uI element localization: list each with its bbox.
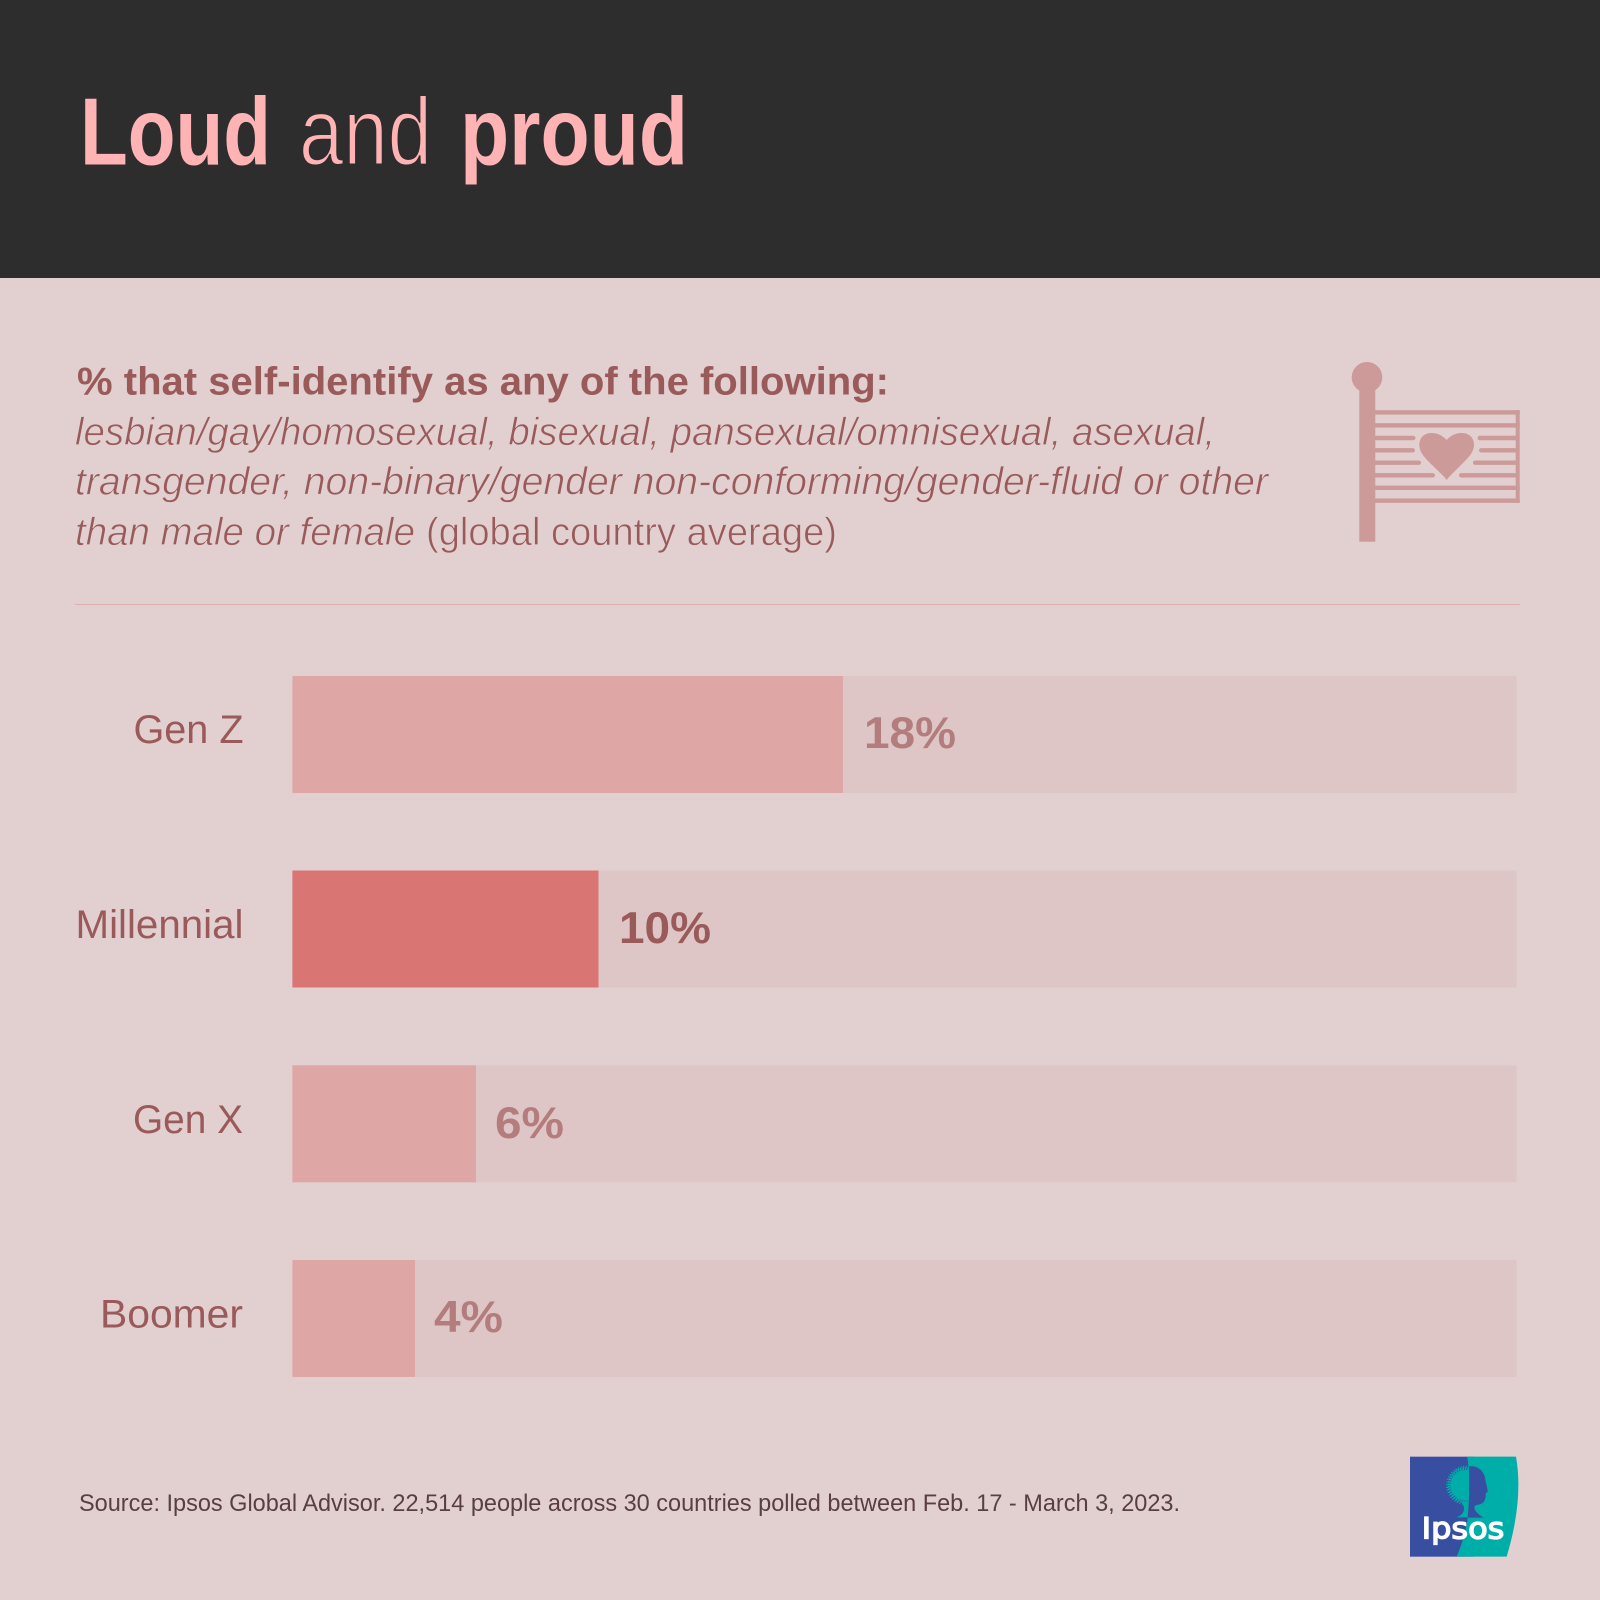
logo tree <box>1446 1466 1470 1518</box>
row: Boomer <box>100 1260 1516 1377</box>
description body: transgender, non-binary/gender non-conforming/gender-fluid or other <box>75 460 1270 504</box>
logo wordmark: Ipsos <box>1422 1511 1504 1545</box>
description body: (global country average) <box>426 511 837 554</box>
row: Gen X: Gen X <box>133 1098 243 1142</box>
divider <box>75 604 1520 605</box>
icon: Ipsos logo <box>1410 1457 1518 1557</box>
row: Gen X: 6% <box>495 1099 564 1148</box>
title <box>80 78 688 186</box>
bar chart <box>76 676 1516 1377</box>
description body: than male or female <box>75 511 415 554</box>
row: Gen Z <box>134 676 1516 793</box>
row: Gen Z: Gen Z <box>134 708 244 752</box>
title: Loud <box>80 78 271 186</box>
row: Millennial: Millennial <box>76 903 244 947</box>
panel: header band <box>0 0 1600 278</box>
title: and <box>299 78 432 186</box>
row: Millennial <box>76 870 1516 988</box>
source note: Source: Ipsos Global Advisor. 22,514 people across 30 countries polled between Feb. 17 - March 3, 2023. <box>79 1490 1180 1517</box>
row: Boomer: Boomer <box>100 1292 243 1336</box>
row: Gen X <box>133 1065 1516 1182</box>
row: Millennial: 10% <box>619 904 711 953</box>
row: Gen Z: 18% <box>864 709 956 758</box>
logo head <box>1468 1466 1488 1518</box>
title: proud <box>460 78 688 186</box>
icon: flag with heart <box>1352 362 1520 542</box>
description heading: % that self-identify as any of the following: <box>77 360 889 404</box>
description body: lesbian/gay/homosexual, bisexual, pansexual/omnisexual, asexual, <box>75 411 1215 454</box>
description body <box>75 411 1270 554</box>
row: Boomer: 4% <box>434 1293 503 1342</box>
panel: description <box>75 360 1270 554</box>
